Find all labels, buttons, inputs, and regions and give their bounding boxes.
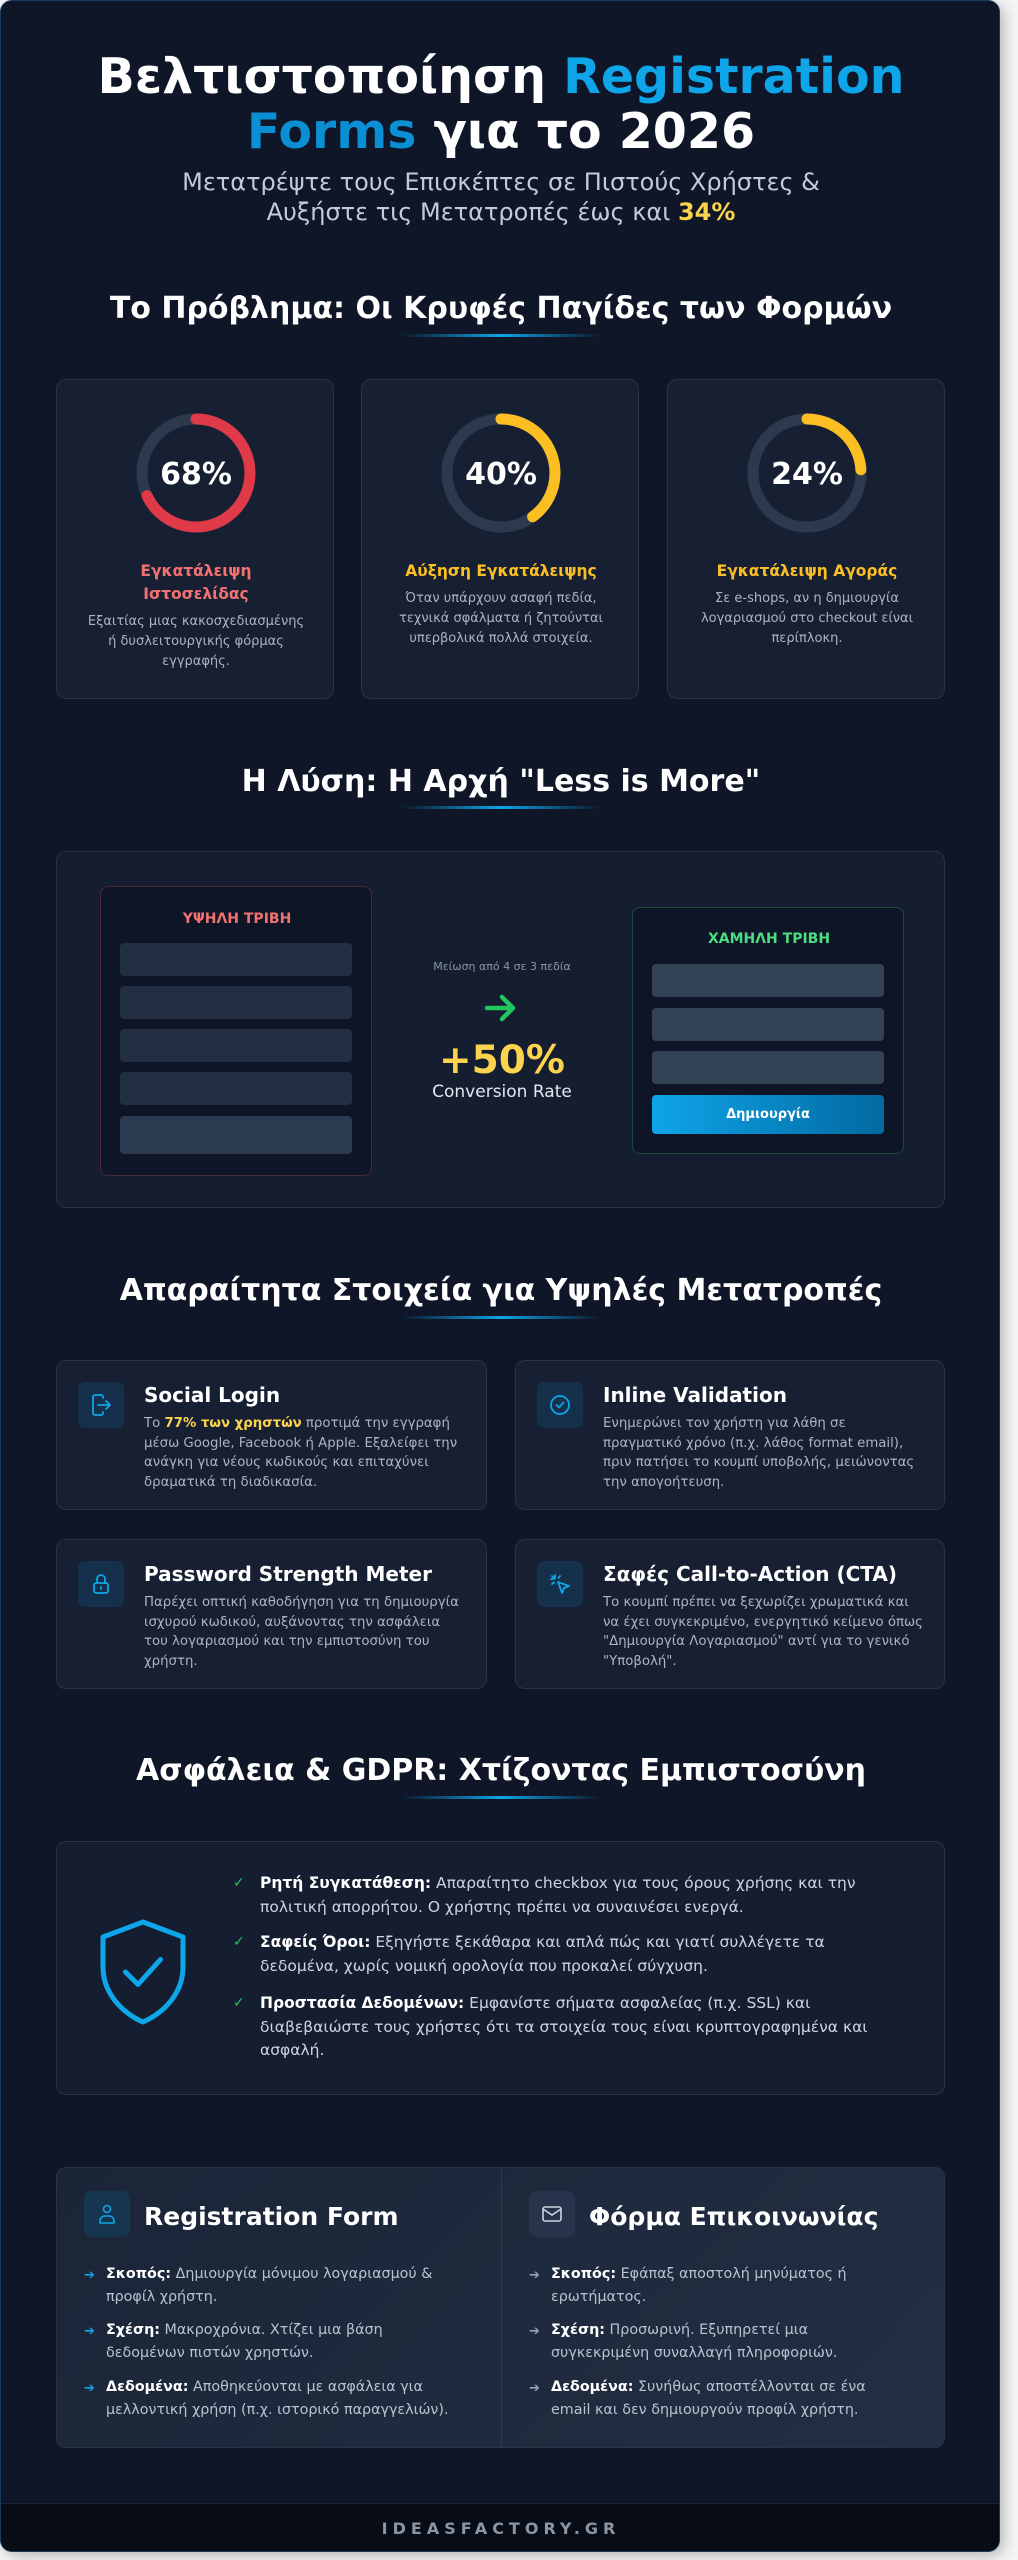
bullets: Σκοπός: Εφάπαξ αποστολή μηνύματος ή ερωτήματος.: [551, 2266, 847, 2305]
donut chart 24%: [748, 414, 866, 532]
description: Ενημερώνει τον χρήστη για λάθη σε πραγματικό χρόνο (π.χ. λάθος format email), πριν πατήσει το κουμπί υποβολής, μειώνοντας την απογοήτευση.: [603, 1416, 914, 1490]
icon: mail: [529, 2191, 575, 2237]
low friction form: [632, 907, 904, 1154]
bullets: ➔: [84, 2268, 95, 2283]
list item: consent: ✓: [233, 1875, 245, 1891]
title: Registration Form: [144, 2202, 399, 2231]
stat label: Conversion Rate: [432, 1082, 572, 1102]
panel: solution: [56, 851, 945, 1208]
donut chart 40%: [442, 414, 560, 532]
footer: IDEASFACTORY.GR: [382, 2519, 620, 2538]
donut chart 68%: [136, 414, 256, 532]
title: Φόρμα Επικοινωνίας: [589, 2202, 878, 2231]
stat title: Αύξηση Εγκατάλειψης: [405, 562, 597, 580]
bullets: Σκοπός: Δημιουργία μόνιμου λογαριασμού & προφίλ χρήστη.: [106, 2266, 432, 2305]
stat title: [140, 562, 252, 603]
stat description: Εξαιτίας μιας κακοσχεδιασμένης ή δυσλειτουργικής φόρμας εγγραφής.: [88, 614, 304, 669]
subtitle: [182, 168, 820, 226]
center: reduction note: Μείωση από 4 σε 3 πεδία: [433, 960, 571, 973]
panel: stat 40%: [361, 379, 639, 699]
column: registration form: ➔: [84, 2381, 95, 2396]
panel: stat 24%: [667, 379, 945, 699]
title: Forms για το 2026: [247, 103, 755, 160]
title: Βελτιστοποίηση Registration: [97, 48, 905, 105]
stat description: Σε e-shops, αν η δημιουργία λογαριασμού στο checkout είναι περίπλοκη.: [701, 591, 913, 646]
column: contact form: Δεδομένα: Συνήθως αποστέλλονται σε ένα email και δεν δημιουργούν προφίλ χρήστη.: [551, 2379, 866, 2418]
panel: stat 68%: [56, 379, 334, 699]
stat description: Όταν υπάρχουν ασαφή πεδία, τεχνικά σφάλματα ή ζητούνται υπερβολικά πολλά στοιχεία.: [399, 591, 603, 646]
subtitle: Μετατρέψτε τους Επισκέπτες σε Πιστούς Χρήστες &: [182, 168, 820, 196]
list item: terms: Σαφείς Όροι: Εξηγήστε ξεκάθαρα και απλά πώς και γιατί συλλέγετε τα δεδομένα, χωρίς νομική ορολογία που προκαλεί σύγχυση.: [260, 1933, 825, 1974]
+50% stat: +50%: [439, 1038, 565, 1083]
list item: consent: Ρητή Συγκατάθεση: Απαραίτητο checkbox για τους όρους χρήσης και την πολιτική απορρήτου. Ο χρήστης πρέπει να συναινέσει ενεργά.: [260, 1874, 856, 1916]
title: [97, 48, 905, 160]
description: Το 77% των χρηστών προτιμά την εγγραφή μέσω Google, Facebook ή Apple. Εξαλείφει την ανάγκη για νέους κωδικούς και επιταχύνει δραματικά τη διαδικασία.: [144, 1416, 457, 1490]
bullets: ➔: [529, 2268, 540, 2283]
column: contact form: Σχέση: Προσωρινή. Εξυπηρετεί μια συγκεκριμένη συναλλαγή πληροφοριών.: [551, 2322, 837, 2361]
column: contact form: ➔: [529, 2381, 540, 2396]
icon: shield: [100, 1920, 186, 2024]
heading: essentials: Απαραίτητα Στοιχεία για Υψηλές Μετατροπές: [120, 1273, 882, 1308]
icon: check circle: [537, 1382, 583, 1428]
list item: terms: ✓: [233, 1934, 245, 1950]
list item: data protection: Προστασία Δεδομένων: Εμφανίστε σήματα ασφαλείας (π.χ. SSL) και διαβεβαιώστε τους χρήστες ότι τα στοιχεία τους είναι κρυπτογραφημένα και ασφαλή.: [260, 1994, 868, 2059]
stat title: Εγκατάλειψη Αγοράς: [717, 562, 897, 580]
arrow: [484, 994, 516, 1022]
title: Social Login: [144, 1383, 280, 1407]
column: contact form: [529, 2191, 878, 2418]
stat title: Εγκατάλειψη: [140, 562, 252, 580]
footer: [1, 2503, 1001, 2553]
stat title: Ιστοσελίδας: [143, 585, 249, 603]
donut chart 68%: 68%: [160, 457, 232, 492]
feature card: password meter: [56, 1539, 487, 1689]
column: registration form: Σχέση: Μακροχρόνια. Χτίζει μια βάση δεδομένων πιστών χρηστών.: [106, 2322, 383, 2361]
column: registration form: ➔: [84, 2324, 95, 2339]
column: registration form: [84, 2191, 449, 2418]
button: Δημιουργία: [726, 1107, 810, 1122]
donut chart 24%: 24%: [771, 457, 843, 492]
title: Inline Validation: [603, 1383, 787, 1407]
icon: user: [84, 2191, 130, 2237]
heading: problem: Το Πρόβλημα: Οι Κρυφές Παγίδες των Φορμών: [110, 291, 892, 326]
column: contact form: ➔: [529, 2324, 540, 2339]
description: Παρέχει οπτική καθοδήγηση για τη δημιουργία ισχυρού κωδικού, αυξάνοντας την ασφάλεια του λογαριασμού και την εμπιστοσύνη του χρήστη.: [144, 1595, 459, 1668]
high friction form: [100, 886, 372, 1176]
feature card: social login: [56, 1360, 487, 1510]
icon: lock: [78, 1561, 124, 1607]
feature card: CTA: [515, 1539, 945, 1689]
panel: GDPR: [56, 1841, 945, 2095]
feature card: inline validation: [515, 1360, 945, 1510]
heading: solution: Η Λύση: Η Αρχή "Less is More": [242, 764, 760, 799]
column: registration form: Δεδομένα: Αποθηκεύονται με ασφάλεια για μελλοντική χρήση (π.χ. ιστορικό παραγγελιών).: [106, 2379, 449, 2418]
panel: comparison: [56, 2167, 945, 2448]
description: Το κουμπί πρέπει να ξεχωρίζει χρωματικά και να έχει συγκεκριμένο, ενεργητικό κείμενο όπως "Δημιουργία Λογαριασμού" αντί για το γενικό "Υποβολή".: [603, 1595, 923, 1668]
icon: login: [78, 1382, 124, 1428]
list item: data protection: ✓: [233, 1995, 245, 2011]
icon: pointer click: [537, 1561, 583, 1607]
heading: security: Ασφάλεια & GDPR: Χτίζοντας Εμπιστοσύνη: [136, 1753, 866, 1788]
subtitle: Αυξήστε τις Μετατροπές έως και 34%: [267, 198, 735, 226]
button: [652, 1095, 884, 1134]
label: ΧΑΜΗΛΗ ΤΡΙΒΗ: [708, 931, 830, 947]
donut chart 40%: 40%: [465, 457, 537, 492]
label: ΥΨΗΛΗ ΤΡΙΒΗ: [183, 911, 291, 927]
title: Σαφές Call-to-Action (CTA): [603, 1562, 897, 1586]
title: Password Strength Meter: [144, 1562, 432, 1586]
